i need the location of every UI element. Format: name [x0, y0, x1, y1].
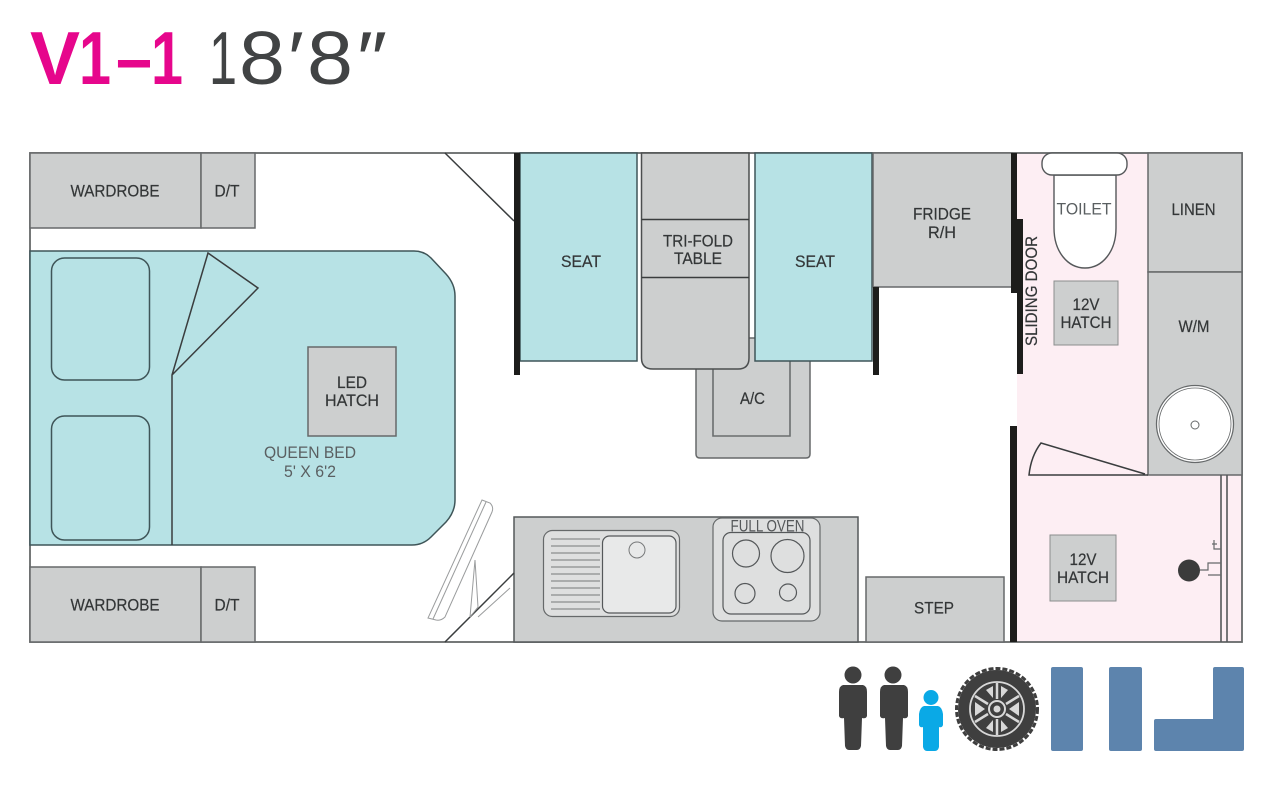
toilet: TOILET: [1056, 200, 1112, 218]
shower screen: [1221, 475, 1227, 642]
floor plan: [30, 153, 1242, 642]
dressing table bottom: D/T: [214, 596, 240, 614]
12V hatch upper: HATCH: [1060, 314, 1112, 332]
title: 8: [239, 16, 285, 100]
title: 8: [307, 16, 353, 100]
A/C unit: [696, 338, 810, 458]
ensuite door swing: [1029, 443, 1148, 475]
seat left: SEAT: [561, 253, 601, 271]
sliding door label: SLIDING DOOR: [1023, 236, 1041, 346]
LED hatch: LED: [337, 374, 367, 392]
sink: [544, 530, 680, 616]
linen: LINEN: [1172, 201, 1216, 219]
dressing table bottom: [201, 567, 255, 642]
title: ″: [357, 16, 387, 100]
12V hatch lower: [1050, 535, 1116, 601]
cooktop: [713, 518, 820, 621]
tri-fold table: TABLE: [674, 250, 722, 268]
icon: child: [919, 690, 943, 751]
12V hatch upper: [1054, 281, 1118, 345]
title: –: [116, 16, 152, 100]
icon: single bed: [1051, 667, 1083, 751]
kitchen bench: [514, 517, 858, 642]
queen bed: [30, 251, 455, 545]
linen: [1148, 153, 1242, 272]
12V hatch upper: 12V: [1072, 296, 1100, 314]
seat right: [755, 153, 872, 361]
queen bed: QUEEN BED: [264, 444, 356, 462]
wardrobe bottom: [30, 567, 201, 642]
title: [30, 16, 387, 100]
LED hatch: HATCH: [325, 392, 379, 410]
tri-fold table: TRI-FOLD: [663, 232, 733, 250]
step: [866, 577, 1004, 642]
12V hatch lower: 12V: [1070, 551, 1096, 569]
wardrobe top: [30, 153, 201, 228]
open window with strut: [428, 500, 510, 620]
title: 1: [209, 16, 237, 100]
12V hatch lower: HATCH: [1057, 569, 1109, 587]
seat left: [520, 153, 637, 361]
A/C unit: A/C: [740, 390, 765, 408]
dressing table top: D/T: [214, 182, 240, 200]
icon: single bed: [1109, 667, 1142, 751]
title: ′: [288, 16, 304, 100]
entry door diagonal top: [445, 153, 514, 221]
outer wall: [30, 153, 1242, 642]
panel: bathroom floor: [1017, 153, 1242, 642]
washing machine and basin: [1148, 272, 1242, 475]
tri-fold table: [642, 153, 749, 369]
fridge: R/H: [928, 224, 956, 242]
dressing table top: [201, 153, 255, 228]
wardrobe bottom: WARDROBE: [70, 596, 160, 614]
seat right: SEAT: [795, 253, 835, 271]
wardrobe top: WARDROBE: [70, 182, 160, 200]
fridge: FRIDGE: [913, 206, 971, 224]
title: 1: [79, 16, 111, 100]
icon: adult: [880, 666, 908, 750]
wall bars: [514, 153, 1023, 642]
LED hatch: [308, 347, 396, 436]
title: V: [30, 16, 80, 100]
icon: adult: [839, 666, 867, 750]
step: STEP: [914, 600, 954, 618]
toilet: [1042, 153, 1127, 268]
entry door diagonal bottom: [445, 573, 514, 642]
title: 1: [151, 16, 183, 100]
icon: wheel: [956, 668, 1038, 750]
icon: L-shaped lounge: [1154, 667, 1244, 751]
cooktop: FULL OVEN: [730, 518, 804, 536]
washing machine and basin: W/M: [1178, 318, 1210, 336]
shower head and taps: [1178, 540, 1221, 582]
fridge: [873, 153, 1012, 287]
queen bed: 5' X 6'2: [284, 463, 336, 481]
